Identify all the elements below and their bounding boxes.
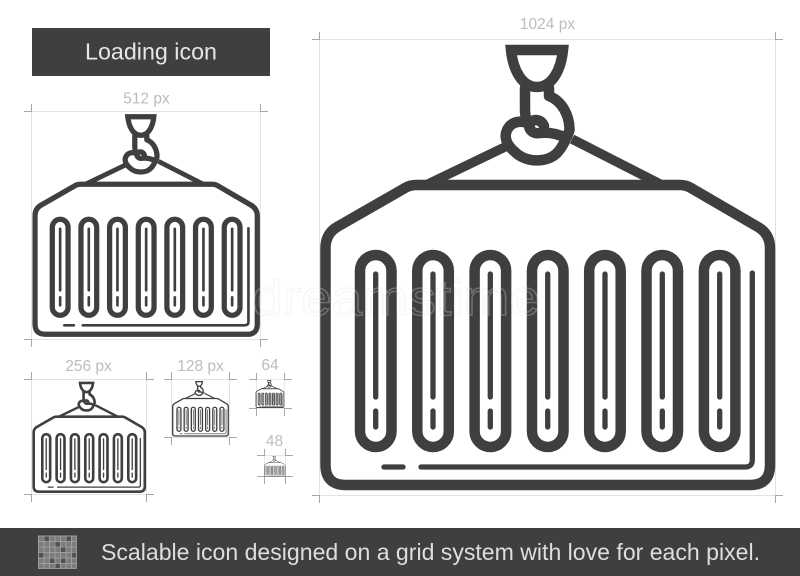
watermark: dreamstime: [252, 270, 540, 326]
title banner: Loading icon: [85, 38, 217, 64]
size guide: 1024 px: 1024 px: [520, 16, 575, 33]
title banner: [32, 28, 270, 76]
icon: container on hook, 512 px: [35, 117, 257, 334]
icon: pixel grid: [38, 536, 76, 568]
size guide: 64 px: 64: [261, 357, 279, 374]
size guide: 128 px: 128 px: [177, 358, 224, 375]
size guide: 512 px: 512 px: [123, 90, 170, 108]
icon: container on hook, 1024 px: [326, 50, 770, 485]
size guide: 256 px: [24, 358, 154, 502]
size guide: 128 px: [164, 358, 237, 445]
icon: container on hook, 128 px: [173, 382, 228, 436]
size guide: 512 px: [24, 90, 268, 347]
size guide: 64 px: [249, 357, 292, 416]
footer tagline: Scalable icon designed on a grid system with love for each pixel.: [101, 539, 760, 565]
size guide: 48 px: [257, 433, 293, 484]
footer bar: [0, 528, 800, 576]
size guide: 256 px: 256 px: [65, 358, 112, 375]
icon: container on hook, 64 px: [256, 380, 284, 408]
icon: container on hook, 256 px: [34, 383, 145, 492]
icon: container on hook, 48 px: [264, 456, 285, 477]
size guide: 48 px: 48: [266, 433, 283, 450]
